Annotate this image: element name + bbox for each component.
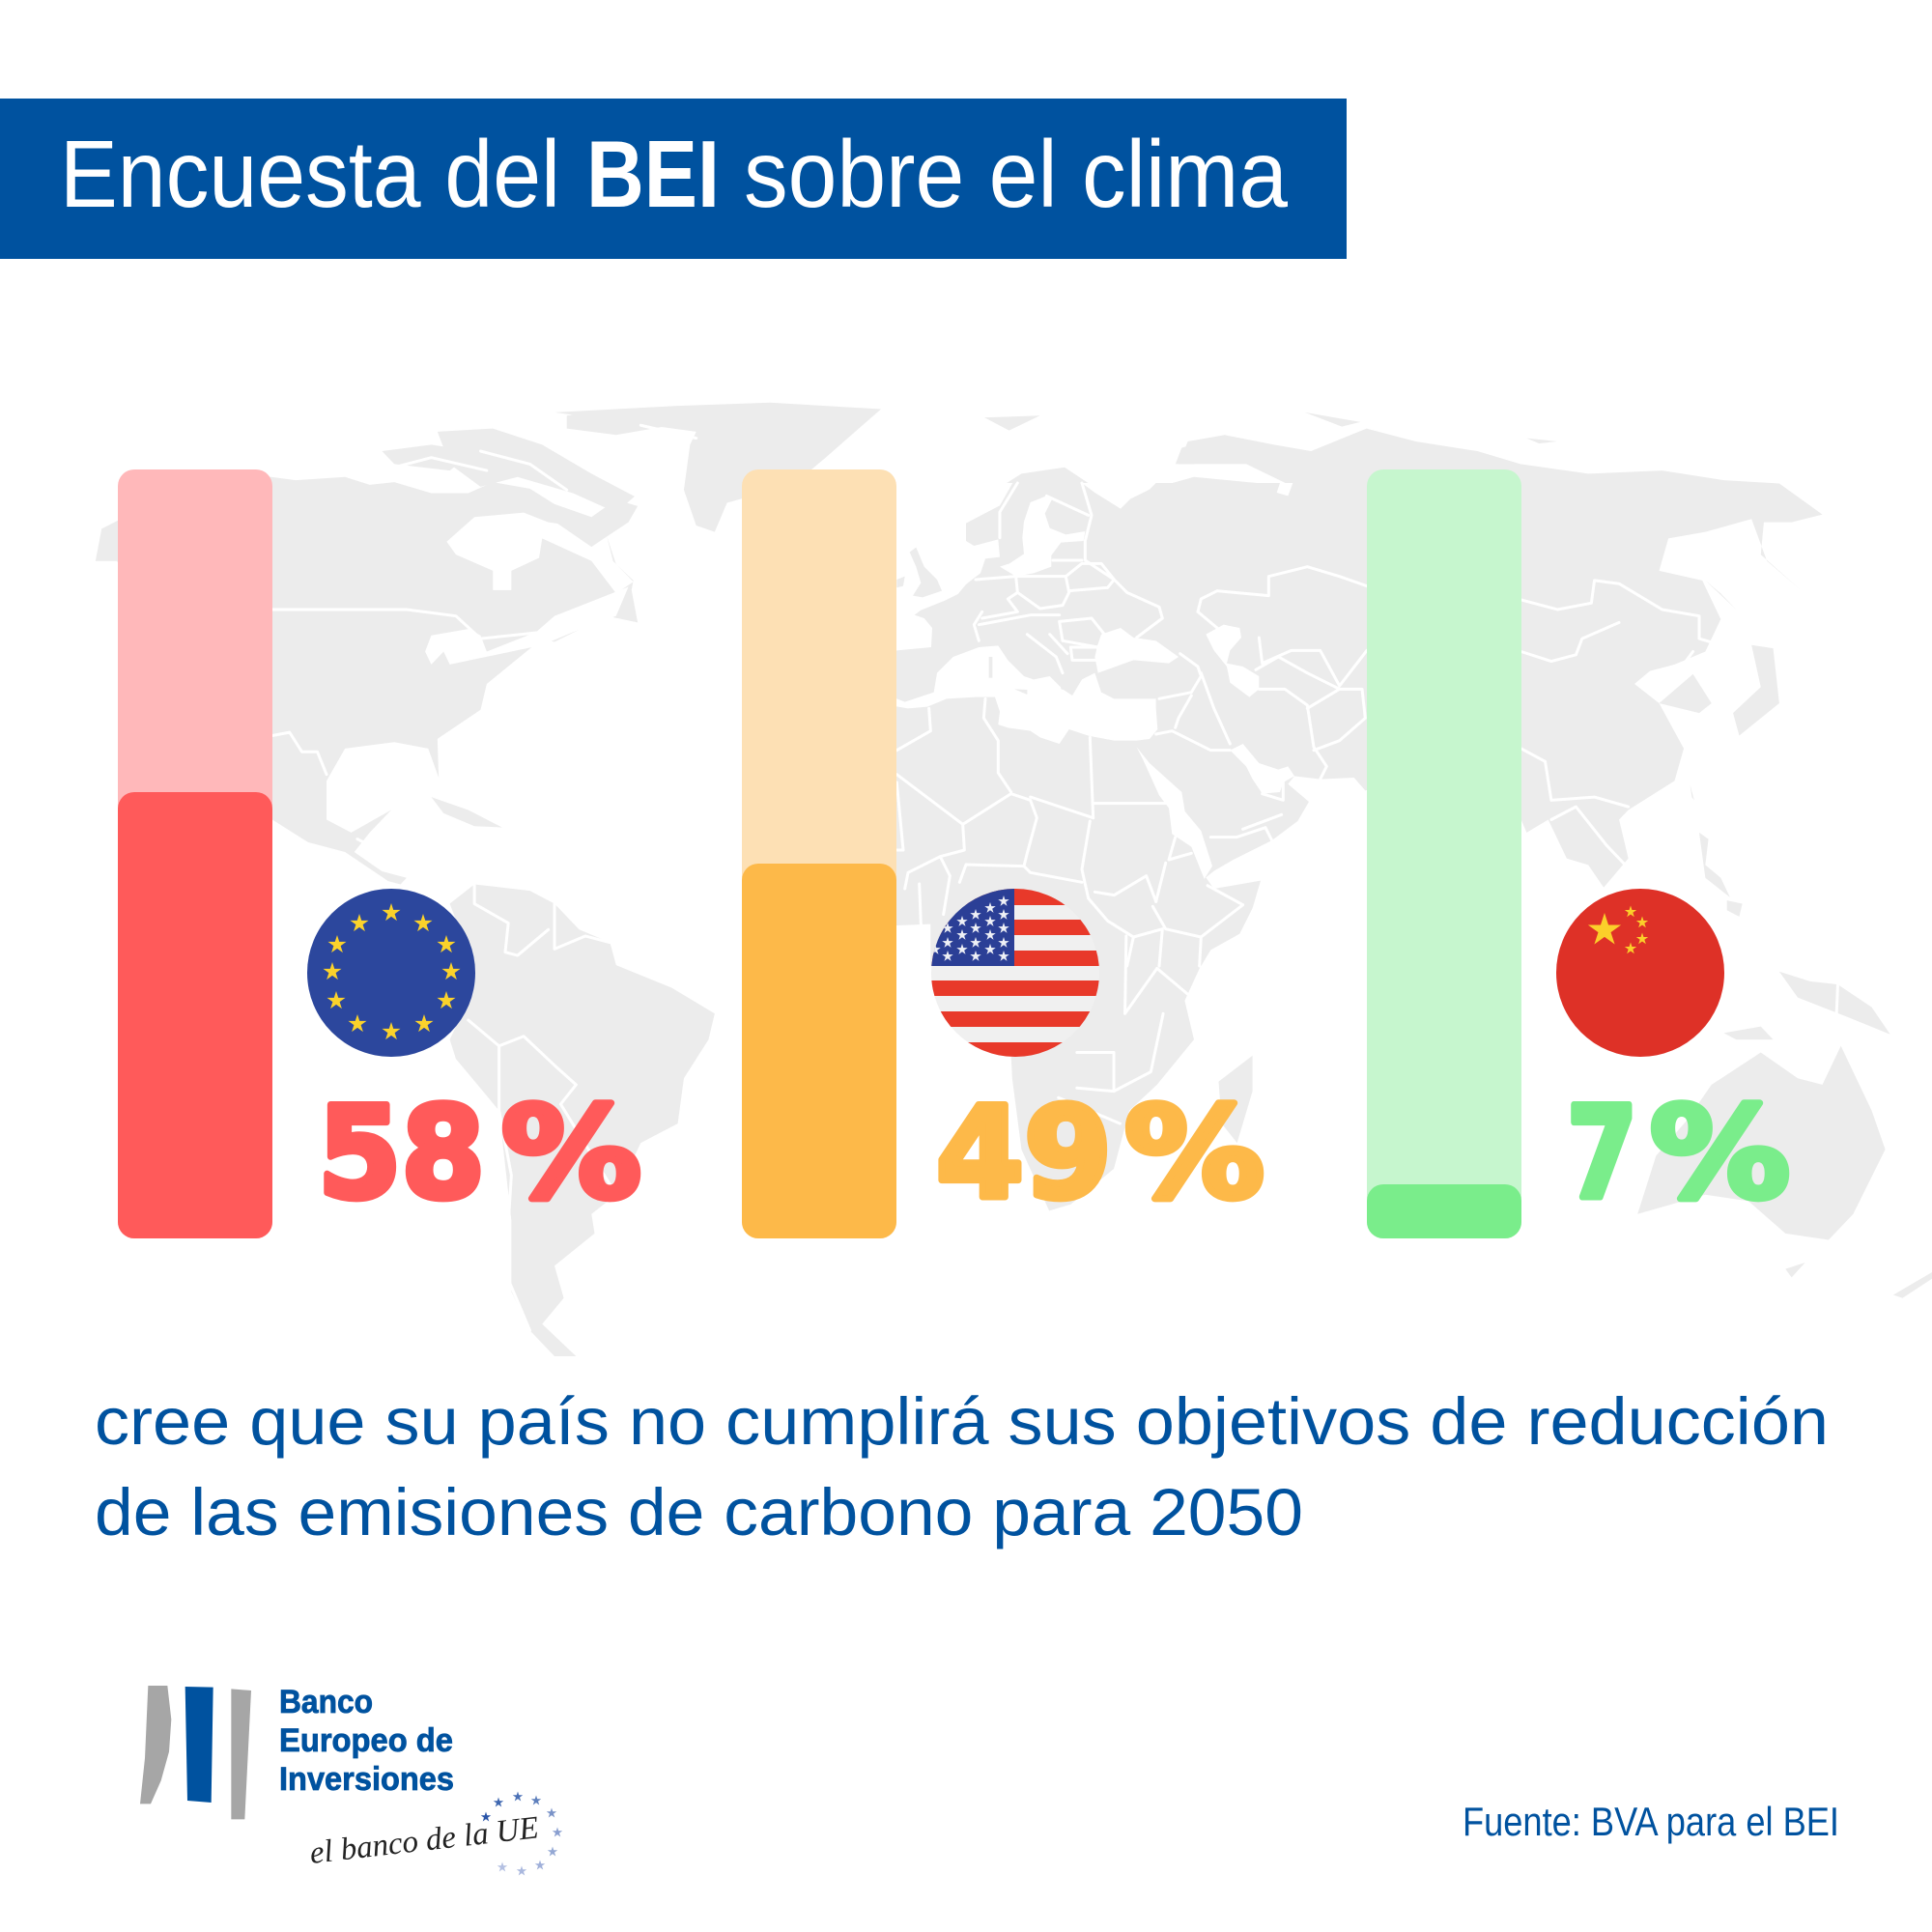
world map background	[96, 403, 1932, 1356]
logo: Banco Europeo de Inversiones	[140, 1684, 562, 1875]
flag: European Union	[307, 889, 475, 1057]
value: 7%: %	[1650, 1079, 1790, 1227]
bar: European Union 58%	[118, 469, 272, 1238]
bar: United States 49%	[742, 469, 896, 1238]
source note: Fuente: BVA para el BEI	[1463, 1799, 1839, 1844]
value: 49%: 49	[936, 1079, 1112, 1227]
logo: Banco Europeo de Inversiones: Inversiones	[279, 1761, 454, 1798]
bar: China 7%	[1367, 469, 1521, 1238]
logo: Banco Europeo de Inversiones: Banco	[279, 1684, 373, 1720]
logo: Banco Europeo de Inversiones: Europeo de	[279, 1722, 453, 1759]
value: 49%: %	[1124, 1079, 1264, 1227]
statement text: cree que su país no cumplirá sus objetivos de reducción	[95, 1384, 1829, 1459]
title banner	[0, 99, 1347, 259]
title banner: Encuesta del	[60, 121, 560, 227]
title banner: sobre el clima	[744, 121, 1288, 227]
value: 58%	[318, 1079, 641, 1227]
value: 58%: %	[501, 1079, 641, 1227]
title banner: BEI	[586, 121, 720, 227]
value: 7%: 7	[1567, 1079, 1637, 1227]
value: 58%: 58	[318, 1079, 485, 1227]
flag: United States	[929, 889, 1099, 1058]
statement text	[95, 1384, 1829, 1549]
value: 49%	[936, 1079, 1264, 1227]
flag: China	[1556, 889, 1724, 1057]
value: 7%	[1567, 1079, 1790, 1227]
statement text: de las emisiones de carbono para 2050	[95, 1475, 1303, 1549]
logo: Banco Europeo de Inversiones: el banco de la UE	[308, 1810, 540, 1871]
